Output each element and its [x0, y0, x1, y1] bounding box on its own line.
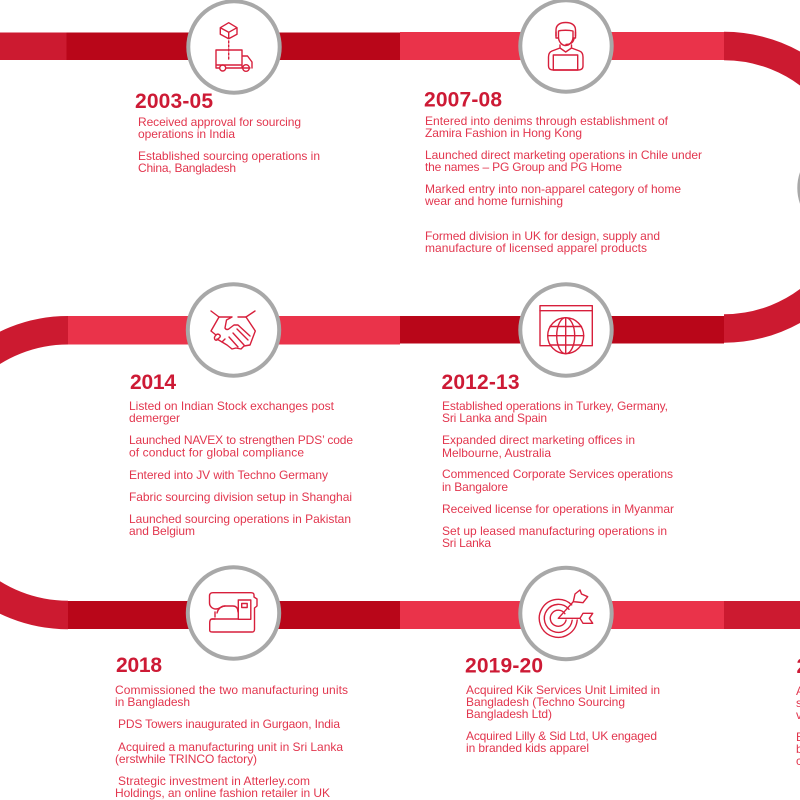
- text block: Listed on Indian Stock exchanges post: [129, 399, 335, 413]
- text block: Bangladesh Ltd): [466, 707, 552, 721]
- icon: sewing machine: [188, 567, 279, 659]
- text block: operations in India: [138, 127, 235, 141]
- milestone clipped at right edge: [796, 655, 800, 768]
- text block: in Bangladesh: [115, 695, 190, 709]
- text block: Received approval for sourcing: [138, 115, 301, 129]
- text block: Set up leased manufacturing operations in: [442, 524, 667, 538]
- text block: Sri Lanka and Spain: [442, 411, 547, 425]
- text block: the names – PG Group and PG Home: [425, 160, 622, 174]
- text block: Entered into JV with Techno Germany: [129, 468, 328, 482]
- text block: Bangladesh (Techno Sourcing: [466, 695, 625, 709]
- text block: China, Bangladesh: [138, 161, 236, 175]
- text block: [424, 114, 702, 255]
- milestone 2003-05: [135, 1, 320, 175]
- year heading: 2003-05: [135, 90, 213, 113]
- text block: (erstwhile TRINCO factory): [115, 752, 257, 766]
- icon: handshake: [188, 284, 279, 376]
- text block: Melbourne, Australia: [442, 446, 551, 460]
- timeline ribbon: [0, 32, 800, 629]
- year heading: 2014: [130, 371, 176, 394]
- text block: [442, 399, 674, 550]
- text block: Received license for operations in Myanmar: [442, 502, 674, 516]
- text block: Launched direct marketing operations in Chile under: [425, 148, 702, 162]
- partial circle at right edge: [799, 142, 800, 234]
- text block: Marked entry into non-apparel category of home: [425, 182, 681, 196]
- milestone 2012-13: [442, 284, 674, 550]
- text block: Entered into denims through establishment of: [425, 114, 669, 128]
- milestone 2014: [129, 284, 353, 538]
- milestone 2019-20: [465, 568, 660, 755]
- text block: Acquired Lilly & Sid Ltd, UK engaged: [466, 729, 657, 743]
- text block: [129, 399, 353, 538]
- icon: browser window with globe: [520, 284, 612, 376]
- text block: Launched NAVEX to strengthen PDS’ code: [129, 433, 353, 447]
- text block: Established sourcing operations in: [138, 149, 320, 163]
- text block: [466, 683, 660, 755]
- text block: in Bangalore: [442, 480, 508, 494]
- icon: target with arrows: [520, 568, 612, 659]
- text block: demerger: [129, 411, 180, 425]
- text block: wear and home furnishing: [424, 194, 563, 208]
- text block: PDS Towers inaugurated in Gurgaon, India: [118, 717, 340, 731]
- text block: Fabric sourcing division setup in Shanghai: [129, 490, 352, 504]
- text block: Zamira Fashion in Hong Kong: [425, 126, 582, 140]
- text block: and Belgium: [129, 524, 195, 538]
- text block: Launched sourcing operations in Pakistan: [129, 512, 351, 526]
- text block: Expanded direct marketing offices in: [442, 433, 635, 447]
- text block: Strategic investment in Atterley.com: [118, 774, 310, 788]
- year heading: 2007-08: [424, 88, 502, 112]
- year heading: 2012-13: [442, 371, 520, 394]
- text block: Commenced Corporate Services operations: [442, 467, 673, 481]
- text block: manufacture of licensed apparel products: [425, 241, 647, 255]
- text block: Holdings, an online fashion retailer in UK: [115, 786, 330, 800]
- icon: delivery truck with parcel: [188, 1, 280, 93]
- milestone 2018: [115, 567, 348, 800]
- milestone 2007-08: [424, 0, 702, 255]
- text block: [115, 683, 348, 800]
- icon: person with headset and laptop: [520, 0, 612, 92]
- year heading: 2018: [116, 654, 162, 677]
- text block: [138, 115, 320, 175]
- year heading: 2019-20: [465, 654, 543, 678]
- text block: in branded kids apparel: [466, 741, 589, 755]
- text block: Acquired a manufacturing unit in Sri Lanka: [118, 740, 343, 754]
- text block: of conduct for global compliance: [129, 446, 304, 460]
- text block: Sri Lanka: [442, 536, 491, 550]
- text block: Formed division in UK for design, supply and: [425, 229, 660, 243]
- text block: Established operations in Turkey, Germany,: [442, 399, 668, 413]
- text block: Commissioned the two manufacturing units: [115, 683, 348, 697]
- text block: Acquired Kik Services Unit Limited in: [466, 683, 660, 697]
